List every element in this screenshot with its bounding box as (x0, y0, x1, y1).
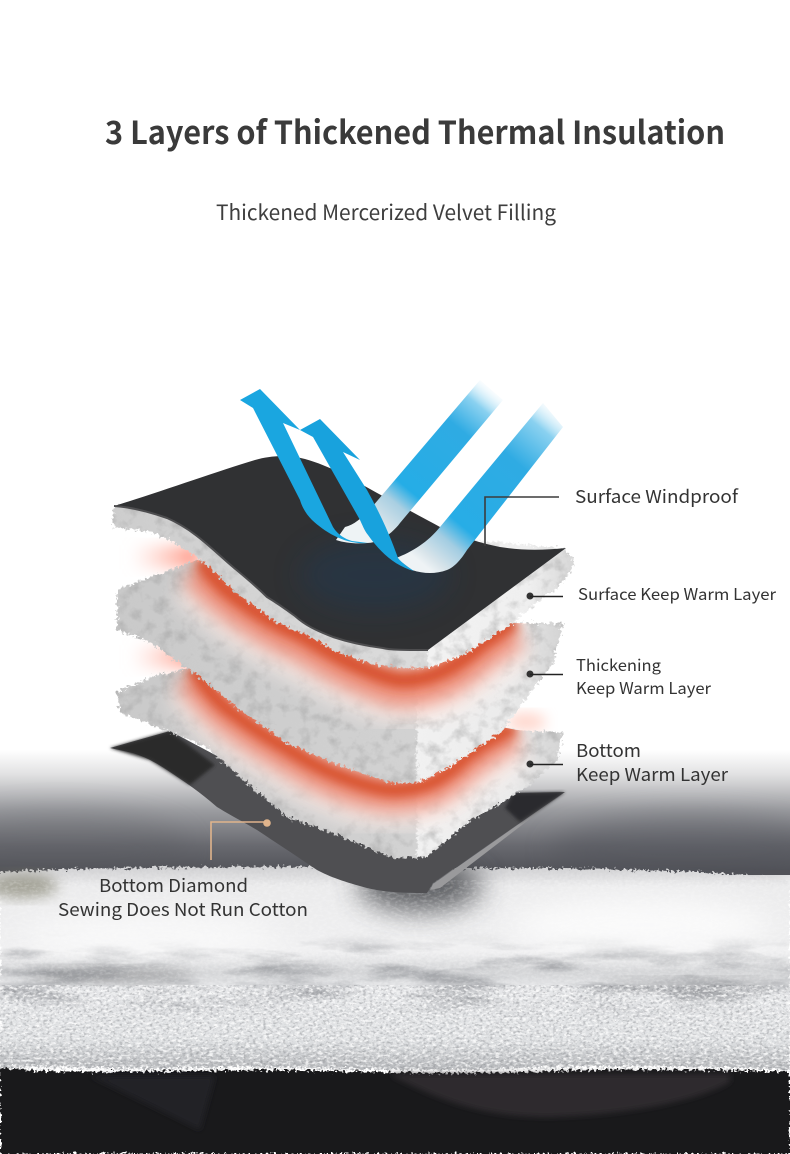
outgoing arrow 1 (240, 389, 368, 543)
incoming wind beam B (396, 403, 563, 573)
callout: surface windproof (485, 483, 739, 546)
callout: bottom keep warm layer (526, 737, 729, 787)
callout: surface windproof: Surface Windproof (575, 483, 739, 509)
layer: thickening keep warm layer (117, 560, 563, 783)
incoming wind beam A (336, 380, 503, 543)
layer: surface windproof black sheet (114, 456, 566, 650)
callout: thickening keep warm layer: Keep Warm Layer (576, 675, 712, 699)
callout: bottom diamond sewing: Sewing Does Not Run Cotton (58, 896, 308, 922)
fluffy cotton ground (0, 859, 790, 1070)
dark fabric backdrop (0, 750, 790, 890)
icon: blue airflow arrows deflected by surface (240, 380, 563, 573)
layer: surface keep warm layer (113, 505, 575, 668)
callout: thickening keep warm layer: Thickening (576, 652, 661, 676)
red heat band on bottom layer (190, 668, 515, 798)
callout: surface keep warm layer: Surface Keep Warm Layer (578, 581, 777, 605)
subtitle: Thickened Mercerized Velvet Filling (216, 197, 556, 227)
layer: bottom keep warm layer (117, 668, 563, 858)
callout: thickening keep warm layer (526, 652, 712, 699)
red heat band on thickening layer (195, 560, 515, 693)
pink heat glows between layers (130, 545, 546, 731)
title: 3 Layers of Thickened Thermal Insulation (105, 108, 725, 154)
layer: bottom diamond-sewn black lining (110, 731, 565, 893)
callout: bottom diamond sewing: Bottom Diamond (99, 872, 248, 898)
black jacket fabric at bottom (0, 1068, 790, 1154)
outgoing arrow 2 (300, 419, 414, 571)
callout: bottom diamond sewing (58, 819, 308, 922)
callout: bottom keep warm layer: Bottom (576, 737, 641, 763)
callout: bottom keep warm layer: Keep Warm Layer (576, 761, 729, 787)
